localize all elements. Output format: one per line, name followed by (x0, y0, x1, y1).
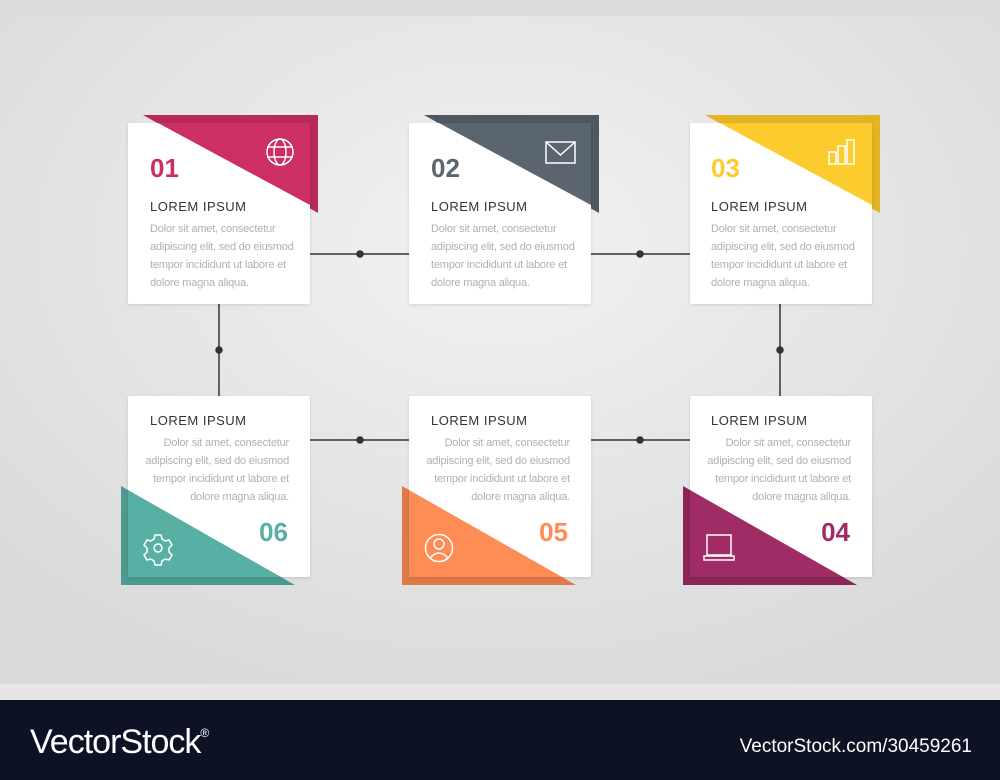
card 05: 05 (539, 517, 568, 547)
card 03: dolore magna aliqua. (711, 277, 810, 289)
card 03: LOREM IPSUM (711, 199, 808, 214)
card 03: tempor incididunt ut labore et (711, 259, 847, 271)
connector lines (216, 251, 783, 443)
card 02: Dolor sit amet, consectetur (431, 223, 557, 235)
icon: gear (144, 535, 172, 565)
card 04: LOREM IPSUM (711, 413, 808, 428)
icon: user (426, 534, 452, 562)
card 01: 01 (150, 153, 179, 183)
card 05: Dolor sit amet, consectetur (445, 437, 571, 449)
card 02: adipiscing elit, sed do eiusmod (431, 241, 575, 253)
card 06: adipiscing elit, sed do eiusmod (145, 455, 289, 467)
card 01: LOREM IPSUM (150, 199, 247, 214)
card 01: tempor incididunt ut labore et (150, 259, 286, 271)
card 05: dolore magna aliqua. (471, 491, 570, 503)
card 06: LOREM IPSUM (150, 413, 247, 428)
card 05: LOREM IPSUM (431, 413, 528, 428)
card 05: tempor incididunt ut labore et (434, 473, 570, 485)
card 01 (128, 115, 318, 304)
card 06: tempor incididunt ut labore et (153, 473, 289, 485)
icon: envelope (546, 142, 575, 163)
card 04: adipiscing elit, sed do eiusmod (707, 455, 851, 467)
card 06 (121, 396, 310, 585)
card 04: 04 (821, 517, 851, 547)
card 03 (690, 115, 880, 304)
card 01: Dolor sit amet, consectetur (150, 223, 276, 235)
footer: ® (200, 726, 209, 740)
card 06: Dolor sit amet, consectetur (164, 437, 290, 449)
footer: VectorStock (30, 723, 200, 761)
card 06: dolore magna aliqua. (190, 491, 289, 503)
card 01: dolore magna aliqua. (150, 277, 249, 289)
card 04: Dolor sit amet, consectetur (726, 437, 852, 449)
card 02: 02 (431, 153, 460, 183)
card 04 (683, 396, 872, 585)
card 06: 06 (259, 517, 288, 547)
icon: laptop (704, 535, 734, 560)
footer: VectorStock.com/30459261 (740, 736, 972, 757)
card 04: dolore magna aliqua. (752, 491, 851, 503)
card 03: Dolor sit amet, consectetur (711, 223, 837, 235)
card 03: 03 (711, 153, 740, 183)
card 05 (402, 396, 591, 585)
card 01: adipiscing elit, sed do eiusmod (150, 241, 294, 253)
card 05: adipiscing elit, sed do eiusmod (426, 455, 570, 467)
footer (0, 700, 1000, 780)
icon: globe (267, 139, 293, 165)
card 02: dolore magna aliqua. (431, 277, 530, 289)
card 03: adipiscing elit, sed do eiusmod (711, 241, 855, 253)
card 02: tempor incididunt ut labore et (431, 259, 567, 271)
icon: bar chart (829, 140, 854, 164)
card 02: LOREM IPSUM (431, 199, 528, 214)
card 04: tempor incididunt ut labore et (715, 473, 851, 485)
card 02 (409, 115, 599, 304)
